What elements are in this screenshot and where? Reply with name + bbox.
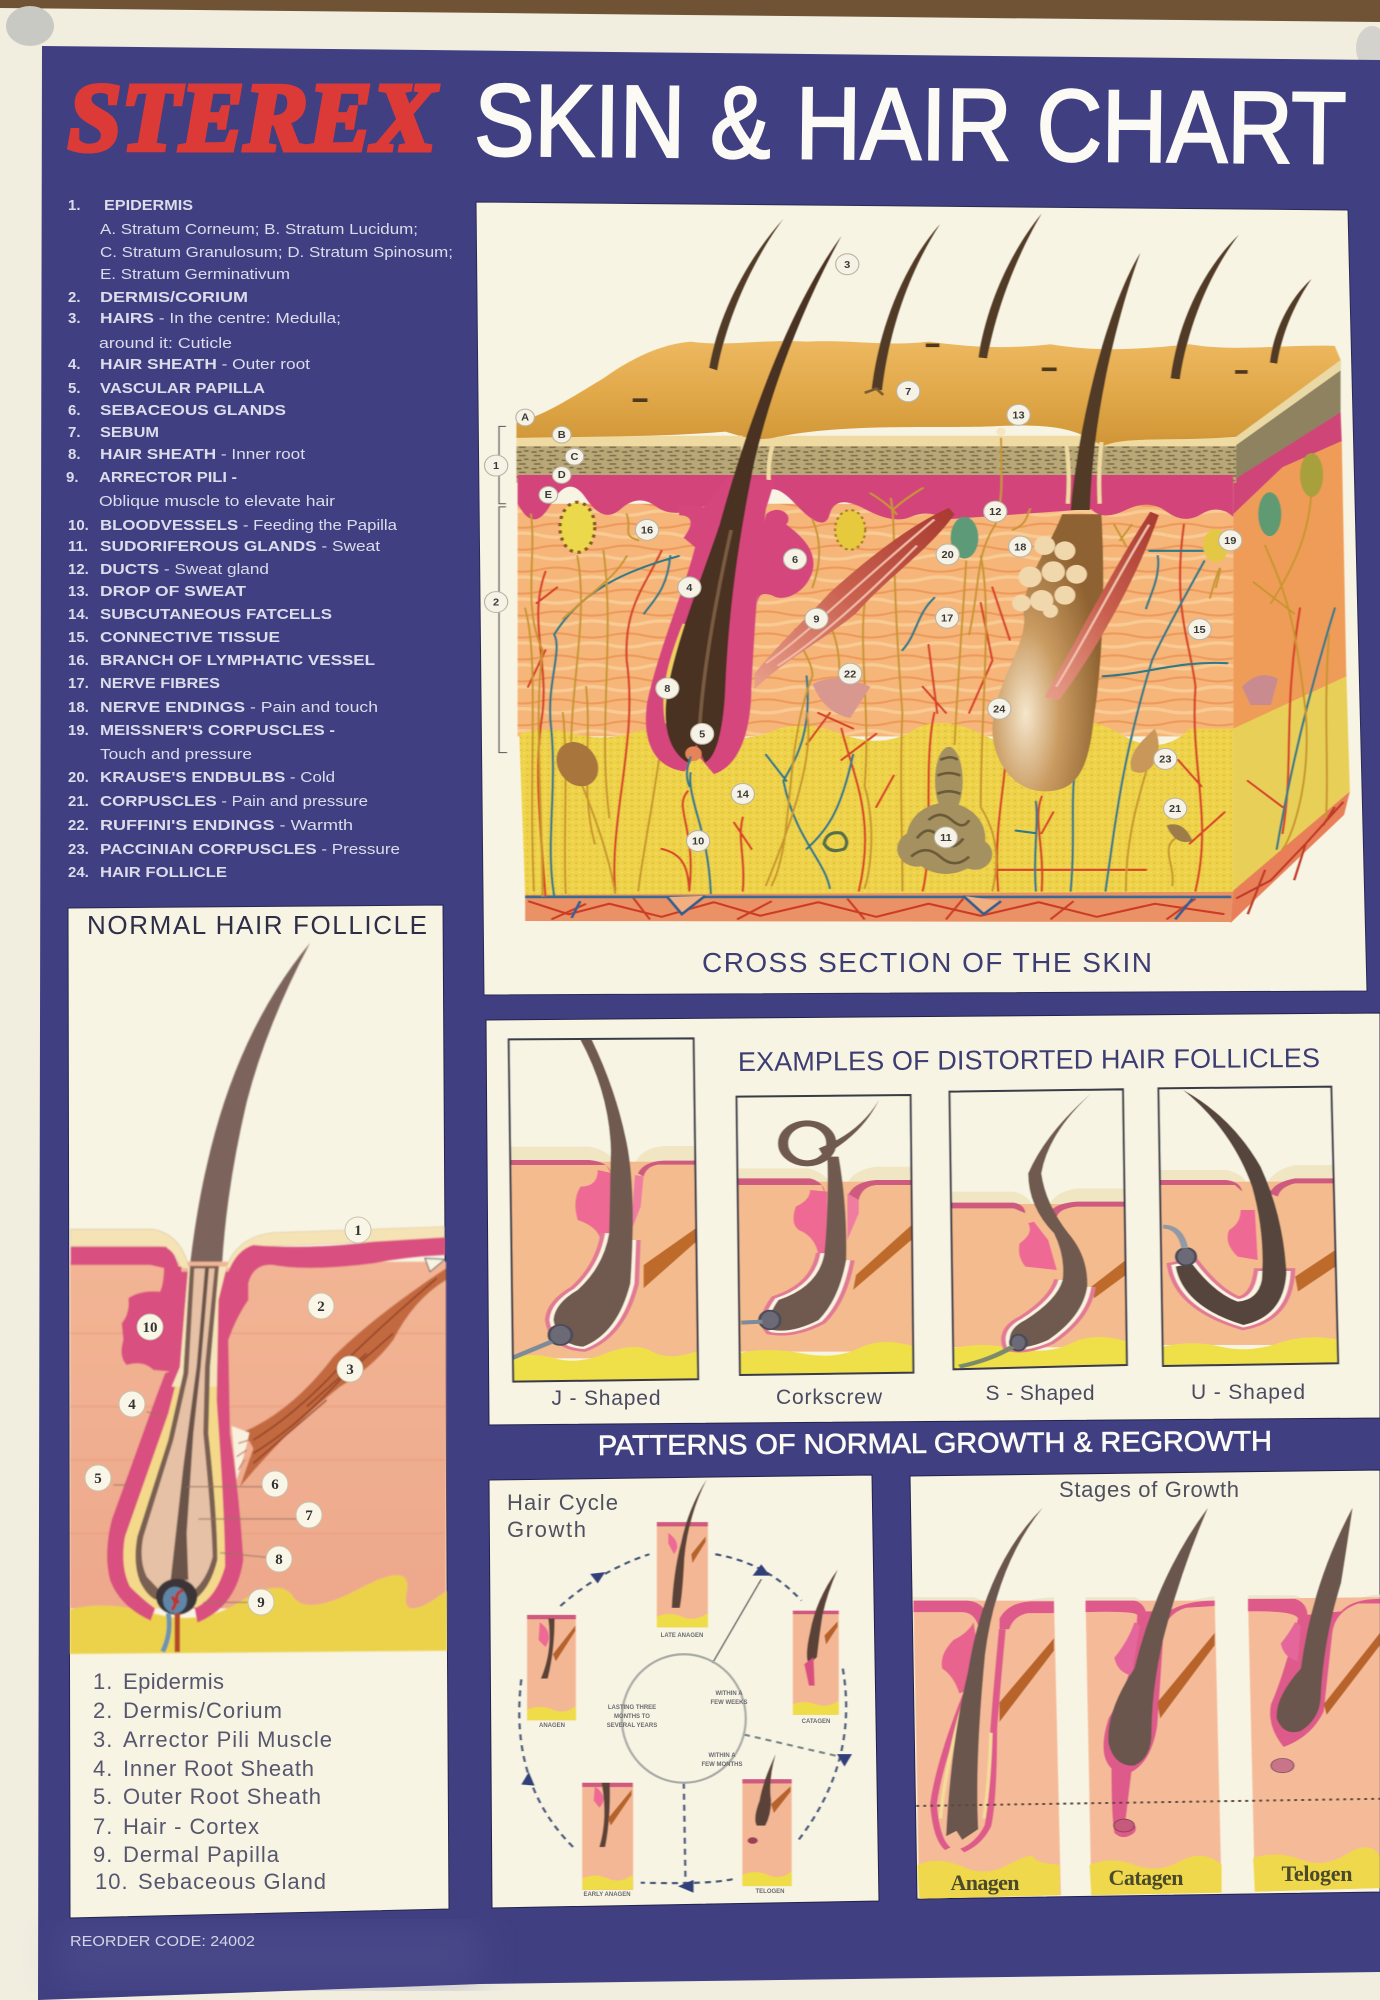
follicle legend: 3.: [93, 1727, 113, 1752]
numbered key of skin parts: HAIRS - In the centre: Medulla;: [100, 310, 341, 327]
diagram: U-shaped follicle: [1158, 1087, 1339, 1366]
number markers on follicle: 6: [271, 1477, 279, 1493]
numbered key of skin parts: 9.: [66, 469, 79, 486]
number markers on cross section: 13: [1012, 411, 1025, 421]
number markers on cross section: B: [558, 430, 566, 441]
number markers on follicle: 8: [275, 1552, 283, 1568]
skin surface layers: [516, 436, 1236, 451]
anagen column: [913, 1508, 1061, 1899]
cycle tiny labels: SEVERAL YEARS: [607, 1723, 657, 1729]
number markers on cross section: 7: [905, 387, 911, 398]
number markers on follicle: 7: [305, 1508, 313, 1524]
sweat gland: [897, 747, 992, 874]
number markers on cross section: 10: [692, 837, 704, 848]
follicle with sheath: [646, 478, 775, 774]
follicle legend: Sebaceous Gland: [138, 1869, 327, 1894]
numbered key of skin parts: CORPUSCLES - Pain and pressure: [100, 793, 368, 810]
numbered key of skin parts: DROP OF SWEAT: [100, 583, 246, 600]
number markers on cross section: 19: [1224, 536, 1237, 547]
cycle tiny labels: MONTHS TO: [614, 1714, 650, 1720]
diagram: corkscrew follicle: [737, 1095, 915, 1375]
hair follicle bulb: [992, 514, 1103, 791]
number markers on cross section: 18: [1014, 543, 1027, 553]
diagram: J-shaped follicle: [509, 1038, 701, 1383]
numbered key of skin parts: Oblique muscle to elevate hair: [99, 493, 335, 510]
numbered key of skin parts: NERVE ENDINGS - Pain and touch: [100, 699, 378, 716]
surface strip: [71, 1229, 189, 1268]
follicle legend: 7.: [93, 1814, 113, 1839]
anagen card: [527, 1615, 576, 1720]
number markers on cross section: 21: [1169, 805, 1181, 815]
inner root sheath: [123, 1267, 227, 1608]
number markers on cross section: 17: [941, 614, 953, 624]
layer brackets: [499, 426, 507, 753]
follicle legend: Epidermis: [123, 1669, 225, 1694]
numbered key of skin parts: 6.: [68, 402, 81, 419]
follicle legend: 4.: [93, 1756, 113, 1781]
other hairs: [709, 214, 1312, 510]
cycle tiny labels: [539, 1633, 830, 1898]
number markers on cross section: 5: [699, 730, 705, 740]
right face of block: [1233, 360, 1341, 483]
telogen column: [1248, 1508, 1380, 1892]
numbered key of skin parts: 10.: [68, 517, 89, 534]
panel: hair cycle growth: [489, 1475, 879, 1908]
numbered key of skin parts: CONNECTIVE TISSUE: [100, 629, 280, 646]
numbered key of skin parts: A. Stratum Corneum; B. Stratum Lucidum;: [100, 221, 418, 238]
numbered key of skin parts: 13.: [68, 583, 89, 600]
panel: hair cycle growth: Growth: [507, 1517, 586, 1542]
diagram: skin block: [499, 214, 1350, 923]
diagram: growth stages: [913, 1508, 1380, 1899]
numbered key of skin parts: 14.: [68, 606, 89, 623]
numbered key of skin parts: 17.: [68, 675, 89, 692]
stage names: Anagen: [950, 1870, 1020, 1895]
heading: normal hair follicle: NORMAL HAIR FOLLICLE: [87, 910, 427, 940]
number markers on cross section: D: [558, 471, 566, 481]
numbered key of skin parts: 18.: [68, 699, 89, 716]
cycle tiny labels: EARLY ANAGEN: [583, 1892, 631, 1898]
numbered key of skin parts: ARRECTOR PILI -: [99, 469, 237, 486]
numbered key of skin parts: BRANCH OF LYMPHATIC VESSEL: [100, 652, 375, 669]
number markers on cross section: 8: [664, 684, 671, 695]
follicle captions: Corkscrew: [776, 1386, 883, 1409]
number markers on follicle: 3: [346, 1362, 354, 1378]
heading: stages of growth: Stages of Growth: [1059, 1477, 1239, 1502]
number markers on follicle: 1: [354, 1223, 362, 1239]
number markers on cross section: 15: [1193, 625, 1206, 636]
panel: cross section of the skin: [476, 202, 1367, 995]
cycle tiny labels: WITHIN A: [708, 1753, 736, 1759]
numbered key of skin parts: [66, 197, 453, 881]
numbered key of skin parts: C. Stratum Granulosum; D. Stratum Spinosum;: [100, 244, 453, 261]
number markers on cross section: 16: [641, 526, 653, 536]
follicle captions: S - Shaped: [986, 1382, 1094, 1405]
follicle captions: J - Shaped: [552, 1387, 660, 1410]
numbered key of skin parts: HAIR SHEATH - Inner root: [100, 446, 306, 463]
diagram: S-shaped follicle: [950, 1089, 1127, 1369]
number markers on follicle: 9: [257, 1595, 265, 1611]
numbered key of skin parts: 4.: [68, 356, 81, 373]
numbered key of skin parts: 19.: [68, 722, 89, 739]
numbered key of skin parts: 11.: [68, 538, 88, 555]
follicle legend: Arrector Pili Muscle: [123, 1727, 333, 1752]
numbered key of skin parts: SUDORIFEROUS GLANDS - Sweat: [100, 538, 381, 555]
numbered key of skin parts: 12.: [68, 561, 89, 578]
caption: cross section: CROSS SECTION OF THE SKIN: [702, 947, 1152, 978]
numbered key of skin parts: BLOODVESSELS - Feeding the Papilla: [100, 517, 398, 534]
corpuscles and glands: [560, 502, 595, 552]
cycle tiny labels: FEW MONTHS: [702, 1762, 742, 1768]
cycle tiny labels: LASTING THREE: [608, 1705, 656, 1711]
number markers on cross section: 23: [1159, 755, 1172, 765]
follicle legend: 9.: [93, 1842, 113, 1867]
number markers on cross section: 20: [942, 551, 954, 561]
numbered key of skin parts: DUCTS - Sweat gland: [100, 561, 269, 578]
numbered key of skin parts: SEBACEOUS GLANDS: [100, 402, 286, 419]
follicle legend: Hair - Cortex: [123, 1814, 260, 1839]
numbered key of skin parts: around it: Cuticle: [99, 335, 232, 352]
follicle captions: U - Shaped: [1191, 1381, 1305, 1404]
follicle legend: Dermal Papilla: [123, 1842, 280, 1867]
numbered key of skin parts: NERVE FIBRES: [100, 675, 220, 692]
numbered key of skin parts: E. Stratum Germinativum: [100, 266, 290, 283]
number markers on cross section: [485, 254, 1242, 851]
cycle tiny labels: WITHIN A: [715, 1691, 743, 1697]
telogen card: [742, 1754, 792, 1886]
late anagen card: [657, 1479, 708, 1627]
number markers on cross section: 22: [844, 670, 856, 680]
heading: distorted hair follicles: EXAMPLES OF DISTORTED HAIR FOLLICLES: [738, 1043, 1320, 1077]
numbered key of skin parts: 1.: [68, 197, 81, 214]
panel: normal hair follicle: [68, 905, 449, 1918]
numbered key of skin parts: 7.: [68, 424, 81, 441]
panel: stages of growth: [910, 1470, 1380, 1899]
numbered key of skin parts: SUBCUTANEOUS FATCELLS: [100, 606, 332, 623]
cycle tiny labels: TELOGEN: [755, 1889, 785, 1895]
title: STEREX logo: STEREX: [68, 64, 439, 172]
cycle tiny labels: FEW WEEKS: [710, 1700, 748, 1706]
cycle tiny labels: LATE ANAGEN: [661, 1633, 703, 1639]
number markers on follicle: 2: [317, 1299, 325, 1315]
numbered key of skin parts: PACCINIAN CORPUSCLES - Pressure: [100, 841, 400, 858]
panel: distorted hair follicles: [486, 1013, 1380, 1425]
numbered key of skin parts: 15.: [68, 629, 89, 646]
follicle legend: 2.: [93, 1698, 113, 1723]
heading: hair cycle growth: Hair Cycle: [507, 1490, 618, 1515]
numbered key of skin parts: 24.: [68, 864, 89, 881]
numbered key of skin parts: 23.: [68, 841, 89, 858]
numbered key of skin parts: 16.: [68, 652, 89, 669]
number markers on cross section: 2: [493, 598, 499, 609]
cycle arrows: [519, 1554, 846, 1883]
numbered key of skin parts: HAIR SHEATH - Outer root: [100, 356, 311, 373]
cycle tiny labels: ANAGEN: [539, 1723, 565, 1729]
numbered key of skin parts: 8.: [68, 446, 81, 463]
number markers on cross section: 14: [737, 790, 749, 800]
number markers on cross section: 3: [844, 260, 850, 271]
follicle legend: 10.: [95, 1869, 129, 1894]
muscles: [754, 508, 955, 689]
catagen card: [793, 1570, 839, 1715]
cycle tiny labels: CATAGEN: [802, 1719, 830, 1725]
numbered key of skin parts: HAIR FOLLICLE: [100, 864, 227, 881]
follicle captions: [552, 1381, 1305, 1410]
numbered key of skin parts: 3.: [68, 310, 81, 327]
numbered key of skin parts: DERMIS/CORIUM: [100, 289, 248, 306]
vessels and nerves: [528, 525, 1300, 896]
follicle legend: Dermis/Corium: [123, 1698, 283, 1723]
number markers on cross section: A: [521, 413, 530, 423]
numbered key of skin parts: 20.: [68, 769, 89, 786]
numbered key of skin parts: 21.: [68, 793, 89, 810]
numbered key of skin parts: KRAUSE'S ENDBULBS - Cold: [100, 769, 335, 786]
number markers on cross section: 9: [813, 615, 820, 625]
follicle legend: 1.: [93, 1669, 113, 1694]
follicle legend: Outer Root Sheath: [123, 1784, 322, 1809]
numbered key of skin parts: 2.: [68, 289, 81, 306]
number markers on cross section: 11: [940, 833, 952, 844]
number markers on cross section: 24: [993, 705, 1006, 715]
follicle legend: 5.: [93, 1784, 113, 1809]
diagram: follicle illustration: [70, 943, 447, 1654]
numbered key of skin parts: MEISSNER'S CORPUSCLES -: [100, 722, 335, 739]
numbered key of skin parts: 5.: [68, 380, 81, 397]
dark sheath, peach inner and medulla: [136, 1266, 219, 1599]
number markers on cross section: 12: [989, 508, 1002, 518]
numbered key of skin parts: EPIDERMIS: [104, 197, 193, 214]
follicle legend: [93, 1669, 333, 1894]
dermal papilla: [156, 1579, 197, 1615]
diagram: cycle artwork: [519, 1479, 852, 1893]
heading: patterns of growth: PATTERNS OF NORMAL GROWTH & REGROWTH: [598, 1425, 1272, 1461]
numbered key of skin parts: Touch and pressure: [100, 746, 252, 763]
number markers on follicle: 10: [142, 1320, 158, 1336]
numbered key of skin parts: SEBUM: [100, 424, 159, 441]
reorder code: REORDER CODE: 24002: [70, 1933, 255, 1950]
catagen column: [1086, 1508, 1222, 1895]
number markers on cross section: E: [545, 490, 552, 501]
number markers on follicle: 5: [94, 1471, 102, 1487]
pink epidermis and outer sheath: [71, 1237, 445, 1623]
stage names: Catagen: [1108, 1865, 1184, 1890]
early anagen card: [582, 1783, 633, 1890]
numbered key of skin parts: RUFFINI'S ENDINGS - Warmth: [100, 817, 353, 834]
number markers on cross section: C: [570, 452, 579, 463]
numbered key of skin parts: 22.: [68, 817, 89, 834]
arrector muscle: [240, 1268, 446, 1487]
numbered key of skin parts: VASCULAR PAPILLA: [100, 380, 265, 397]
stage names: [950, 1861, 1352, 1895]
follicle legend: Inner Root Sheath: [123, 1756, 315, 1781]
number markers on cross section: 4: [686, 583, 693, 594]
number markers on cross section: 1: [493, 462, 499, 472]
number markers on follicle: 4: [128, 1397, 136, 1413]
stage names: Telogen: [1282, 1861, 1352, 1886]
number markers on cross section: 6: [792, 555, 798, 566]
number markers on follicle: [85, 1217, 371, 1615]
